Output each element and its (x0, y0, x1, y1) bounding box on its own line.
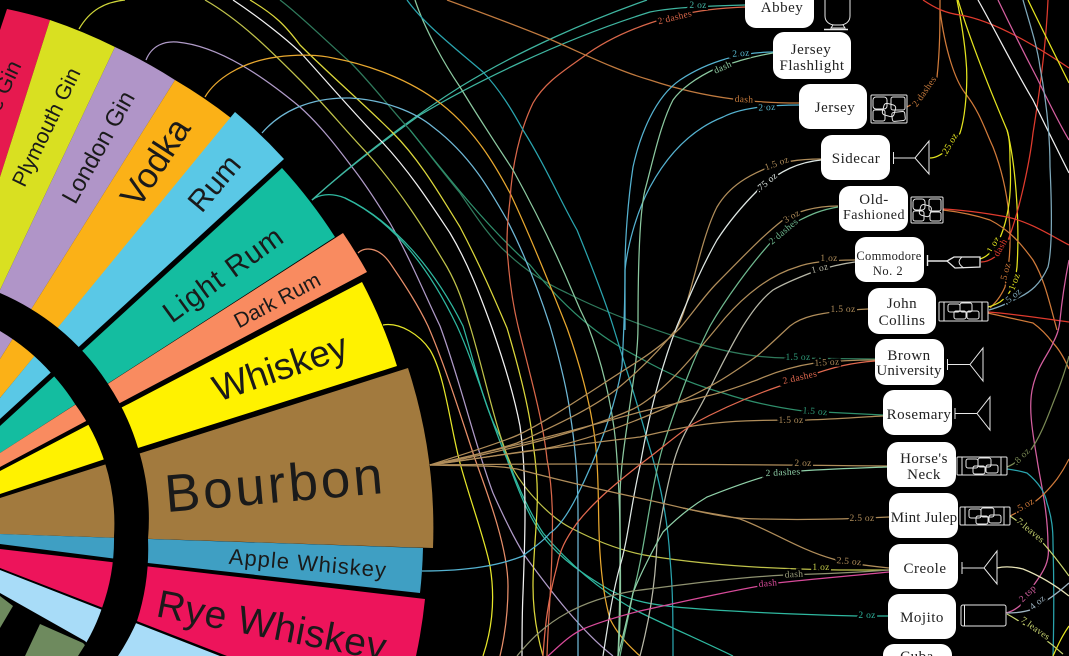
amount labels on connector lines: .8 oz (1012, 447, 1033, 468)
amount labels on connector lines: 3 oz (782, 209, 802, 226)
label: Whiskey: Whiskey (207, 325, 353, 410)
drink: Jersey Flashlight (773, 32, 851, 79)
amount labels on connector lines: 1.5 oz (785, 353, 811, 363)
amount labels on connector lines: 1 oz (810, 262, 830, 276)
amount labels on connector lines: .5 oz (999, 262, 1014, 284)
label: Vodka: Vodka (113, 111, 199, 214)
amount labels on connector lines: 1 oz (1008, 272, 1023, 292)
wedge: olive spirit left (0, 596, 13, 628)
drink: Creole: Creole (904, 561, 946, 577)
drink: Abbey: Abbey (761, 0, 803, 16)
drink: Jersey: Jersey (815, 100, 855, 116)
amount labels on connector lines: 2 dashes (911, 75, 939, 109)
drink: Creole (889, 544, 958, 589)
icon: Old-Fashioned rocks glass (911, 197, 943, 223)
wedge: Rum (0, 112, 284, 419)
wedge: Dark Rum (0, 233, 367, 467)
label: Bourbon: Bourbon (162, 446, 388, 524)
spirits wheel (0, 9, 433, 656)
drink: Sidecar (821, 135, 890, 180)
drink: John Collins (868, 288, 936, 334)
drink: Mint Julep: Mint Julep (891, 510, 957, 526)
amount labels on connector lines: 2 dashes (765, 467, 801, 479)
amount labels on connector lines: .5 oz (1002, 287, 1024, 307)
amount labels on connector lines: .75 oz (754, 171, 780, 195)
amount labels on connector lines: 2 oz (858, 611, 876, 621)
amount labels on connector lines: dash (784, 570, 804, 581)
drink: Old-Fashioned (839, 186, 908, 231)
drink: Horse's Neck (887, 442, 956, 487)
amount labels on connector lines: 2.5 oz (849, 514, 875, 524)
amount labels on connector lines: 4 oz (1028, 594, 1048, 613)
drink: Jersey (799, 84, 867, 129)
icon: Mint Julep highball glass (960, 507, 1010, 525)
drink: Brown University: University (876, 363, 942, 379)
amount labels on connector lines: 2 dashes (657, 9, 693, 27)
icon: Abbey coupe glass (824, 0, 850, 30)
amount labels on connector lines: 1.5 oz (830, 305, 856, 315)
amount labels on connector lines: 7 leaves (1014, 517, 1046, 546)
amount labels on connector lines: 2 oz (794, 459, 812, 469)
icon: Brown University cocktail glass (948, 348, 983, 381)
drink: Horse's Neck: Neck (907, 467, 941, 483)
wedge: Light Rum (0, 168, 335, 453)
drink: Rosemary (883, 390, 952, 435)
icon: Rosemary cocktail glass (955, 397, 990, 430)
amount labels on connector lines: 2 oz (758, 103, 776, 114)
drink: John Collins: Collins (879, 313, 925, 329)
amount labels on connector lines: 1 oz (820, 254, 838, 264)
wedge: Apple Whiskey (0, 534, 423, 593)
label: Plymouth Gin: Plymouth Gin (7, 64, 86, 190)
wedge: Vodka (0, 80, 231, 398)
drink: Brown University: Brown (887, 348, 931, 364)
amount labels on connector lines: dash (734, 95, 754, 106)
drink: Mojito (888, 594, 956, 639)
amount labels on connector lines: 1 oz (986, 235, 1003, 255)
amount labels on connector lines: 1.5 oz (802, 406, 828, 418)
wedge: Whiskey (0, 282, 397, 494)
amount labels on connector lines: .5 oz (1014, 497, 1036, 515)
label: London Gin: London Gin (57, 87, 141, 208)
drink: Horse's Neck: Horse's (900, 451, 948, 467)
icon: Sidecar cocktail glass (894, 141, 929, 174)
drink: Old-Fashioned: Fashioned (843, 208, 905, 223)
amount labels on connector lines (657, 1, 1051, 643)
amount labels on connector lines: 1.5 oz (814, 358, 840, 369)
drink: Jersey Flashlight: Flashlight (779, 58, 845, 74)
drink: Commodore No. 2: No. 2 (873, 264, 903, 278)
label: Apple Whiskey: Apple Whiskey (228, 544, 388, 583)
wedge: Bourbon (0, 368, 433, 548)
label: Light Rum: Light Rum (157, 220, 290, 329)
amount labels on connector lines: 1.5 oz (778, 416, 804, 426)
drink: Commodore No. 2 (855, 237, 924, 282)
wedge: London Gin (0, 47, 175, 359)
wedge: olive spirit right (25, 624, 95, 656)
icon: John Collins highball glass (939, 302, 988, 321)
icon: Commodore sour glass (928, 255, 980, 268)
label: Dark Rum: Dark Rum (230, 268, 325, 333)
drink: Abbey (745, 0, 814, 28)
amount labels on connector lines: 7 leaves (1018, 616, 1051, 643)
label: Rum: Rum (182, 149, 248, 219)
amount labels on connector lines: .25 oz (940, 132, 961, 158)
drink: Old-Fashioned: Old- (859, 192, 889, 208)
icon: Horse's Neck highball glass (957, 457, 1007, 475)
icon: Mojito glass (961, 605, 1006, 626)
drink: Mojito: Mojito (900, 610, 944, 626)
amount labels on connector lines: 2 dashes (768, 217, 801, 247)
icon: Jersey rocks glass (871, 95, 907, 123)
drink: John Collins: John (887, 296, 917, 312)
amount labels on connector lines: dash (713, 60, 734, 77)
amount labels on connector lines: 2 tsp (1018, 584, 1039, 605)
amount labels on connector lines: dash (758, 578, 778, 590)
wedge: Rye Whiskey (0, 549, 425, 656)
amount labels on connector lines: 2.5 oz (836, 556, 862, 568)
drink: Commodore No. 2: Commodore (856, 249, 922, 263)
drink: Mint Julep (889, 493, 958, 538)
drink: Cuba (cropped) (883, 644, 952, 656)
wedge: light blue spirit (0, 570, 220, 656)
drink: Jersey Flashlight: Jersey (791, 42, 831, 58)
amount labels on connector lines: 1.5 oz (764, 155, 791, 173)
drink: Rosemary: Rosemary (887, 407, 951, 423)
black ring (0, 293, 149, 656)
wedge: Plymouth Gin (0, 20, 115, 290)
icon: Creole cocktail glass (962, 551, 997, 584)
amount labels on connector lines: 1 oz (812, 563, 830, 573)
wedge: Sloe Gin (0, 9, 50, 177)
drink: Sidecar: Sidecar (832, 151, 880, 167)
amount labels on connector lines: dash (992, 238, 1010, 259)
amount labels on connector lines: 2 oz (732, 49, 750, 60)
drink: Brown University (875, 339, 944, 385)
amount labels on connector lines: 2 oz (689, 1, 707, 11)
amount labels on connector lines: 2 dashes (782, 369, 818, 387)
